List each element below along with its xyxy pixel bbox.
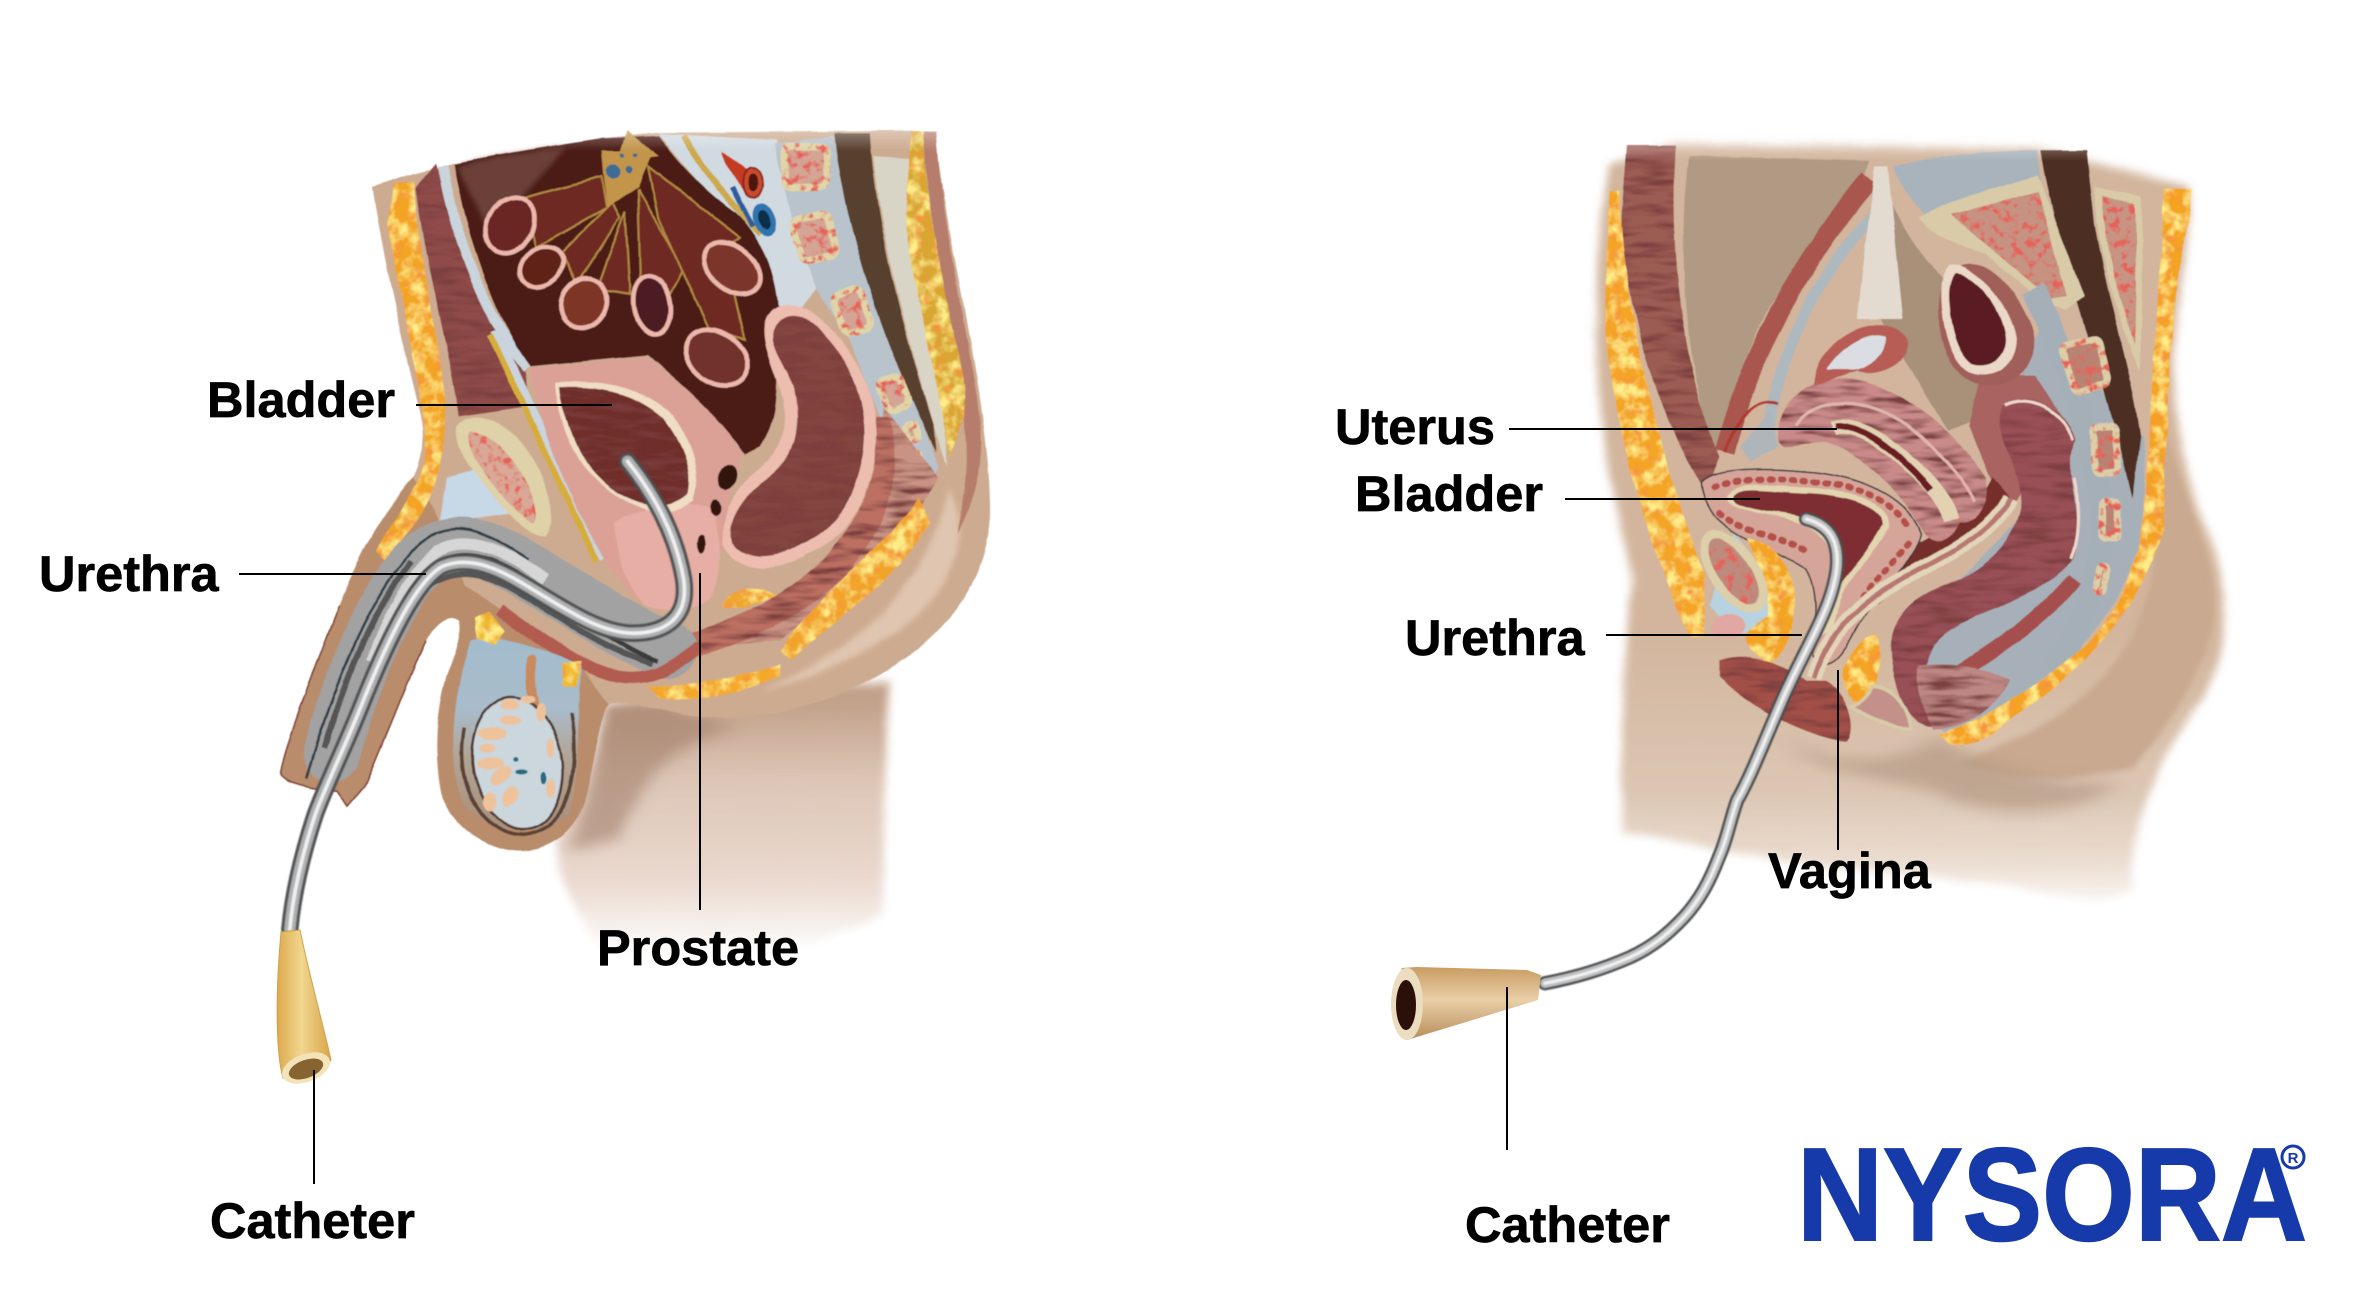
grey ligament band (1765, 204, 1885, 452)
upper rectum lumen (1949, 274, 2006, 365)
sacrum (1918, 175, 2084, 310)
urethra upper highlight (372, 544, 546, 661)
label: Bladder (male): Bladder (207, 371, 395, 428)
posterior spinal elements (873, 156, 946, 467)
posterior sacral marrow (2102, 197, 2136, 344)
vagina lumen (1814, 498, 2010, 679)
bowel tube 5 (648, 166, 745, 340)
posterior wall red band (922, 131, 981, 534)
vagina wall (1814, 498, 2010, 679)
retroperitoneal pale tissue (658, 134, 816, 335)
rectum lumen (731, 316, 864, 557)
upper rectum muscle (1939, 264, 2034, 385)
artery lumen (742, 167, 763, 198)
registered mark: R (2288, 1150, 2299, 1167)
bowel tube 4 (638, 189, 684, 294)
spine connective band (776, 136, 939, 488)
seminiferous lobules (477, 695, 556, 811)
spermatic cord (531, 659, 535, 707)
blue vessel stripe (732, 187, 753, 228)
vertebrae (785, 146, 920, 464)
pubic bone marrow (1699, 532, 1768, 612)
perineal skin shade (1786, 737, 2122, 811)
male thigh (556, 682, 890, 966)
label: Urethra (female): Urethra (1405, 609, 1586, 666)
grey top band (1893, 151, 2041, 214)
hub rim (1391, 968, 1423, 1040)
cavity upper brown tone (457, 147, 566, 233)
testis tunica rings (462, 712, 574, 835)
tissue between uterus and rectum (1969, 375, 2061, 508)
bowel tube 2 (561, 202, 620, 284)
bladder lining (1727, 485, 1889, 635)
rectus muscle (416, 164, 528, 416)
pelvic floor muscle (1949, 579, 2074, 679)
upper rectum rim (1941, 265, 2016, 375)
clitoris (1711, 614, 1746, 638)
inferior fat (648, 664, 781, 699)
hub mouth (1396, 980, 1416, 1030)
male pelvis illustration (281, 90, 990, 966)
bladder lumen rim (555, 382, 696, 512)
label: Uterus: Uterus (1335, 398, 1495, 455)
registered mark (2282, 1146, 2304, 1168)
vein lumen (756, 209, 772, 231)
pubic bone (1687, 519, 1781, 624)
mesentery (526, 166, 745, 340)
iliac vein (749, 200, 780, 240)
vaginal fat (1843, 635, 1880, 707)
male skin silhouette (281, 131, 990, 851)
fallopian tube (1814, 325, 1908, 385)
gluteal muscle band (658, 416, 896, 661)
female skin silhouette (1597, 143, 2224, 900)
bowel loop cross-sections (476, 188, 770, 397)
female pelvis illustration (1545, 105, 2240, 983)
left fat (1605, 191, 1704, 636)
uterus (1778, 379, 1987, 540)
mesentery root (602, 131, 658, 207)
bowel tube 1 (526, 177, 607, 248)
label: Prostate: Prostate (597, 919, 799, 976)
perineal fat (722, 588, 778, 609)
round ligament vessel (1724, 402, 1778, 452)
corpus spongiosum (500, 610, 699, 678)
presacral grey band (2033, 288, 2102, 671)
label: Catheter (male): Catheter (210, 1192, 415, 1249)
ovary (1827, 335, 1885, 370)
label: Vagina: Vagina (1768, 842, 1932, 899)
spinal canal (834, 133, 936, 452)
right fat (1939, 189, 2191, 745)
testis (462, 690, 574, 836)
deep pouch (1878, 477, 2010, 605)
hub mouth (286, 1054, 326, 1084)
uterine cavity (1837, 426, 1931, 490)
female catheter hub (1391, 967, 1541, 1040)
urethra dark stripes (324, 562, 653, 758)
mesenteric vessels (607, 153, 637, 178)
urethra upper dark wall (306, 529, 528, 779)
left rectus muscle (1621, 146, 1719, 492)
urethra corpus (332, 546, 668, 753)
prostatic utricle holes (697, 462, 741, 553)
purple nerve (516, 557, 564, 587)
bladder lumen (559, 387, 689, 505)
broad ligament fan (1857, 166, 1903, 319)
rectum (1890, 399, 2078, 727)
thigh shadow (566, 702, 740, 850)
pelvic floor grey fan (1908, 324, 2145, 732)
spinal canal (2041, 151, 2140, 500)
pelvic cavity background left (1683, 156, 1870, 457)
pubic bone marrow (468, 432, 535, 523)
penis outline (281, 605, 426, 807)
rectum mucosal rim (2005, 402, 2079, 559)
urethra wall (352, 555, 658, 738)
rectum wall (721, 305, 877, 569)
posterior sacral segment (2094, 186, 2143, 370)
bladder wall (531, 358, 742, 608)
pale tissue under pubis (439, 470, 510, 523)
anterior fat (377, 182, 446, 562)
pubic blue tissue (1709, 533, 1781, 635)
prostate (615, 504, 719, 610)
bladder venous dots (1714, 479, 1908, 656)
perineal body (1852, 686, 1911, 730)
belly skin shade (1959, 426, 2214, 779)
sacrum marrow (1952, 191, 2066, 299)
dark abdominal cavity (454, 136, 778, 455)
gluteal fat (781, 498, 930, 659)
myometrium stripes (1796, 403, 1974, 503)
retroperitoneal yellow stripe (684, 136, 760, 235)
catheter in female urethra (1545, 519, 1837, 983)
testis ducts (513, 757, 546, 785)
labia and vestibule (1719, 657, 1852, 741)
bladder wall (1702, 469, 1921, 665)
male catheter hub (277, 930, 334, 1090)
abdominal wall layer (1724, 179, 1870, 452)
pelvic cavity background right (1878, 197, 2026, 431)
iliac artery (722, 153, 760, 197)
uterine lining (1834, 427, 1952, 521)
bowel tube 3 (597, 212, 630, 294)
yellow fascia (490, 335, 597, 562)
hub rim (278, 1046, 334, 1090)
anal canal (1918, 665, 2010, 730)
scrotal fat (476, 613, 582, 687)
label: Catheter (female): Catheter (1465, 1196, 1670, 1253)
catheter in male urethra (290, 461, 684, 929)
presacral layered tissue (699, 406, 939, 646)
label: Bladder (female): Bladder (1355, 465, 1543, 522)
sacral vertebrae (2062, 338, 2119, 592)
pubic bone (456, 417, 551, 536)
scrotum interior (453, 638, 582, 831)
grey side band (1740, 411, 1778, 462)
bladder lumen (1733, 490, 1883, 589)
dorsal vessel (484, 530, 536, 553)
peritoneal layers (443, 166, 602, 559)
buttock highlight (760, 488, 959, 692)
artery inner (747, 173, 758, 192)
pubic fat (1746, 538, 1796, 662)
penis and scrotum darker skin (281, 478, 610, 851)
label: Urethra (male): Urethra (39, 545, 220, 602)
posterior fat (906, 131, 964, 457)
NYSORA logo: NYSORA (1797, 1121, 2307, 1268)
